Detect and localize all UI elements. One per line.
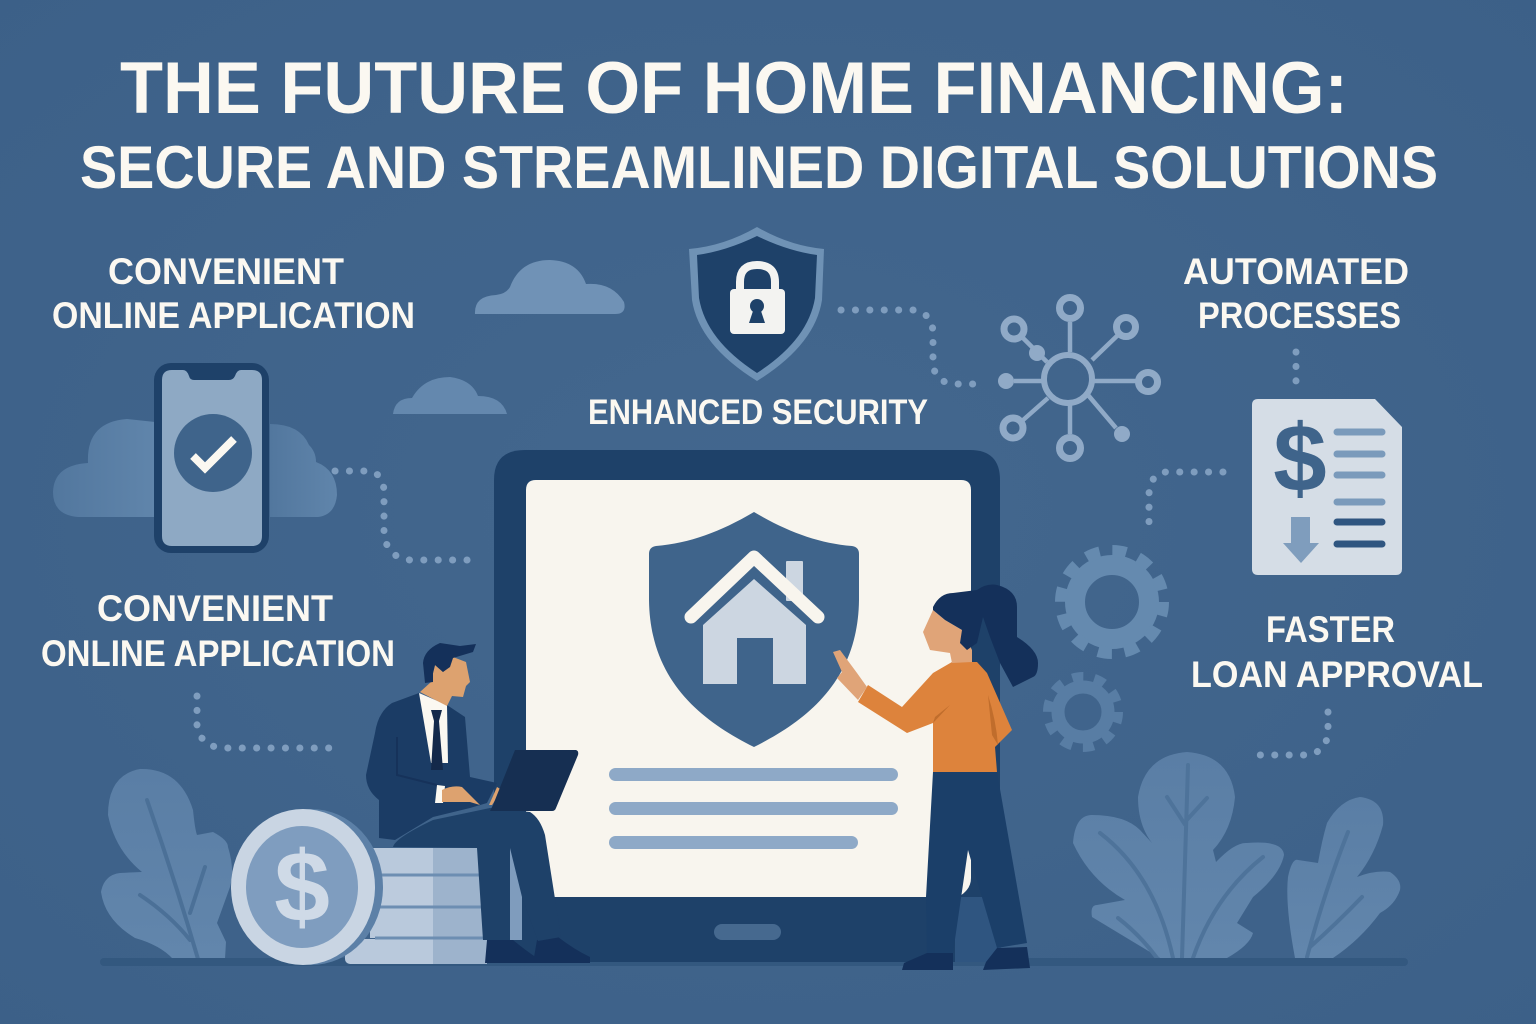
title xyxy=(80,48,1438,201)
man with laptop xyxy=(366,643,590,963)
icon: large gear xyxy=(1061,551,1163,653)
icon: phone with check and cloud xyxy=(53,363,337,553)
woman xyxy=(833,585,1038,970)
connector: shield to network xyxy=(841,310,984,384)
coin stack: $ xyxy=(274,831,330,943)
tablet xyxy=(494,450,1001,962)
plants left xyxy=(101,769,232,959)
label: automated processes xyxy=(1183,251,1409,336)
connector: network to document xyxy=(1149,472,1223,526)
label: faster loan approval xyxy=(1191,609,1483,695)
label: convenient online application top: CONVENIENT xyxy=(108,251,344,292)
label: convenient online application bottom: ONLINE APPLICATION xyxy=(41,633,395,674)
coin stack xyxy=(231,809,522,965)
connector: label to plants xyxy=(1250,712,1328,755)
icon: house shield xyxy=(649,512,859,747)
connector: label to document xyxy=(1292,352,1300,383)
icon: network hub xyxy=(998,298,1158,458)
connector: label to person xyxy=(197,696,342,748)
label: convenient online application bottom: CONVENIENT xyxy=(97,588,333,629)
icon: document with dollar xyxy=(1252,399,1402,575)
label: convenient online application bottom xyxy=(41,588,395,674)
connector: phone to tablet xyxy=(335,471,474,560)
label: automated processes: AUTOMATED xyxy=(1183,251,1409,292)
icon: security shield with padlock xyxy=(689,227,824,381)
label: faster loan approval: LOAN APPROVAL xyxy=(1191,654,1483,695)
label: automated processes: PROCESSES xyxy=(1198,295,1401,336)
icon: document with dollar: $ xyxy=(1273,405,1327,512)
text lines on screen xyxy=(609,768,898,849)
label: faster loan approval: FASTER xyxy=(1266,609,1395,650)
title: THE FUTURE OF HOME FINANCING: xyxy=(120,48,1348,129)
label: enhanced security: ENHANCED SECURITY xyxy=(588,393,928,432)
plants right xyxy=(1073,752,1400,958)
title: SECURE AND STREAMLINED DIGITAL SOLUTIONS xyxy=(80,134,1438,201)
label: convenient online application top: ONLINE APPLICATION xyxy=(52,295,415,336)
icon: small gear xyxy=(1048,677,1118,747)
decorative clouds xyxy=(393,260,625,414)
ground line xyxy=(100,958,1408,966)
label: convenient online application top xyxy=(52,251,415,336)
